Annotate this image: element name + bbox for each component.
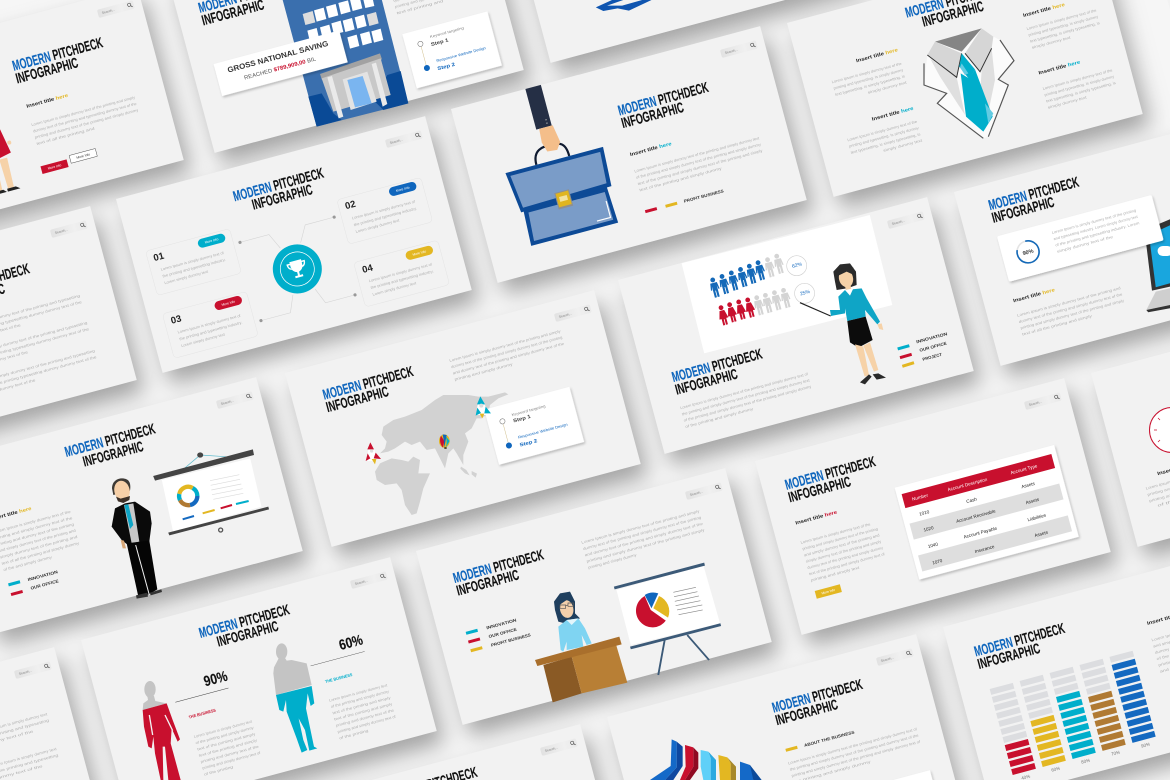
body text: printing and simply dummy — [588, 553, 637, 570]
card 04: the printing and typesetting industry. — [370, 269, 434, 290]
world map — [375, 392, 508, 515]
left column text: text typesetting, is simply typesetting, is — [850, 132, 921, 155]
slide: text only left — [0, 206, 137, 463]
card 01: the printing and typesetting industry. — [162, 258, 226, 278]
body text left: printing and simply dummy text of — [202, 751, 262, 770]
column 70%: 70% — [1111, 750, 1121, 757]
body text: of the printing and simply dummy — [685, 407, 754, 429]
steps card: Keyword targeting — [511, 404, 546, 417]
title: INFOGRAPHIC — [14, 55, 80, 87]
steps card — [402, 11, 502, 88]
column 40% — [990, 683, 1038, 780]
body text — [581, 509, 707, 570]
body text: printing and simply text — [810, 565, 861, 583]
stat 90% — [170, 669, 236, 722]
right column text: printing and typesetting. Is simply dummy — [1044, 75, 1115, 97]
progress card — [997, 195, 1164, 282]
steps card: Responsive Website Design — [436, 46, 486, 63]
subheading: Insert title here — [1013, 287, 1056, 304]
right column text: Insert title here — [1023, 2, 1066, 19]
percentage circles: 62% — [791, 261, 803, 270]
data table: Liabilities — [1027, 512, 1047, 522]
column 60% — [1020, 675, 1068, 775]
illustration: man in suit — [112, 478, 162, 599]
body text left: of the printing — [204, 765, 234, 777]
right column text: Insert title here — [1038, 59, 1081, 76]
data table: Assets — [1021, 481, 1036, 489]
card 04: More Info — [412, 249, 427, 257]
body text: printing and simply dummy — [454, 362, 513, 382]
stat 90%: 90% — [202, 669, 230, 690]
body text: the printing and simply dummy text of the printing and dummy text of the — [789, 734, 919, 772]
left column text: text typesetting, is simply typesetting, is — [835, 74, 905, 97]
card 04 — [354, 240, 450, 307]
data table: Account Description — [947, 477, 988, 492]
card 02: Lorem Ipsum is simply dummy text of — [352, 200, 416, 220]
illustration: desk — [535, 637, 627, 702]
legend: OUR OFFICE — [30, 578, 59, 591]
body text — [1017, 286, 1126, 337]
data table: Account Payable — [963, 526, 998, 540]
people chart: red row — [716, 287, 792, 326]
body text: Lorem Ipsum is simply dummy text of the printing and simply — [449, 329, 561, 363]
slide: account table — [755, 378, 1111, 635]
white card — [847, 770, 940, 780]
right column text: text typesetting, is simply typesetting, is — [1030, 21, 1100, 44]
card 01: 01 — [152, 251, 166, 264]
icon: female body 90% — [143, 681, 181, 780]
body text: Lorem Ipsum is simply dummy text of the printing and simply dummy text of — [680, 372, 809, 410]
illustration: flipchart with pie chart — [614, 563, 721, 675]
body text left: Lorem Ipsum is simply dummy text — [193, 719, 253, 739]
illustration: woman at desk — [554, 592, 592, 652]
slide: briefcase — [451, 26, 807, 283]
body text: of the and simply dummy — [3, 555, 52, 572]
slide: woman with buttons — [0, 0, 184, 243]
title — [232, 166, 329, 218]
title: MODERN PITCHDECK — [63, 421, 157, 461]
illustration: presenter woman — [800, 263, 886, 384]
right column text: simply dummy text — [1047, 95, 1088, 110]
slide: bodies percentage — [81, 557, 437, 780]
column 80% — [1050, 667, 1098, 767]
title: MODERN PITCHDECK — [197, 602, 292, 642]
body text: dummy text of the printing and simply dummy text of the printing — [451, 336, 563, 369]
steps card: Step 1 — [513, 414, 532, 424]
button — [815, 584, 842, 599]
column 60%: 60% — [1051, 766, 1061, 773]
slide: bottom left partial — [0, 647, 101, 780]
title: MODERN PITCHDECK — [973, 621, 1067, 660]
body text right: of the printing and simply dummy — [330, 690, 390, 709]
left column text: Insert title here — [856, 47, 899, 64]
steps card: Step 2 — [437, 62, 456, 72]
column 80%: 80% — [1081, 758, 1091, 765]
body text: and simply dummy text of the printing and — [804, 533, 880, 557]
body text left: printing and dummy text of the — [200, 745, 259, 764]
data table: Cash — [966, 496, 978, 504]
steps card: Keyword targeting — [430, 26, 464, 39]
body text — [634, 136, 766, 192]
body text: dummy text of the printing and simply dummy text of the printing — [583, 516, 702, 551]
buttons — [40, 149, 98, 174]
left column text: Lorem Ipsum is simply dummy text of the — [847, 120, 918, 142]
icon: laptop — [1144, 219, 1170, 312]
right column text — [1023, 0, 1118, 110]
column 90%: 90% — [1141, 742, 1151, 749]
body text: dummy text of the printing and typesetting dummy text of the — [33, 102, 137, 133]
data table: Account Type — [1010, 463, 1038, 475]
card 03: Lorem Ipsum is simply dummy text of — [177, 314, 242, 335]
subheading: Insert title here — [26, 93, 69, 110]
steps card: Responsive Website Design — [518, 423, 568, 440]
body text: printing and dummy text of the printing and simply dummy — [34, 108, 139, 140]
subheading: Insert title here — [795, 510, 838, 527]
button: More Info — [821, 588, 836, 595]
body text — [680, 372, 814, 429]
body text right — [329, 683, 399, 740]
legend: PROFIT BUSINESS — [683, 188, 724, 204]
body text right: text of the printing and simply — [334, 702, 393, 722]
slide: presenter with people chart — [618, 197, 974, 454]
slide: world map — [285, 290, 641, 547]
title: MODERN PITCHDECK — [987, 175, 1081, 214]
card 03: 03 — [170, 313, 183, 327]
illustration: projector screen with donut chart — [153, 449, 269, 535]
left column text: simply dummy text — [867, 80, 908, 95]
body text: printing and simply dummy text of the printing and simply — [1020, 299, 1125, 330]
callout: gross national saving: GROSS NATIONAL SAVING — [226, 39, 329, 75]
title: MODERN PITCHDECK — [321, 364, 415, 404]
icon: clock — [1150, 408, 1170, 452]
body text: simply dummy text of the printing and — [0, 535, 78, 560]
body text left: of the printing and simply dummy — [195, 726, 254, 745]
legend labels: PROJECT — [922, 352, 943, 362]
legend labels — [916, 331, 953, 362]
slide: bar chart — [943, 544, 1170, 780]
body text: the printing and simply dummy text of the printing and simply dummy text — [682, 378, 811, 416]
body text: Lorem Ipsum is simply dummy text of the printing and simply dummy text — [634, 136, 761, 174]
title — [0, 261, 35, 313]
column 90% — [1109, 651, 1158, 751]
data table: 1010 — [919, 509, 930, 517]
card 03: Lorem simply dummy text — [181, 332, 226, 348]
body text — [31, 96, 141, 146]
legend — [898, 346, 914, 366]
data table: Insurance — [974, 544, 995, 554]
body text: Lorem Ipsum is simply dummy text of the — [800, 522, 871, 545]
body text: simply dummy text of the printing and simply — [805, 540, 882, 564]
building illustration — [280, 0, 408, 127]
body text: text of printing and — [396, 0, 444, 15]
icon: 3D chevrons — [650, 739, 762, 780]
progress card: and typesetting industry. Lorem simply dummy text — [1053, 215, 1139, 241]
card 01: Lorem simply dummy text — [164, 269, 209, 285]
data table: 1020 — [923, 525, 935, 533]
left column text: simply dummy text — [883, 138, 924, 153]
icon: hot air balloon — [439, 434, 450, 449]
data table: Assets — [1025, 497, 1040, 505]
card 01: Lorem Ipsum is simply dummy text of — [160, 251, 225, 272]
body text right: printing and simply dummy text of — [337, 714, 397, 734]
title: INFOGRAPHIC — [215, 619, 281, 651]
stacked bar chart — [990, 651, 1158, 780]
card 03 — [162, 291, 258, 358]
body text: text of the printing and simply dummy — [639, 166, 722, 192]
body text: Lorem Ipsum is simply dummy text of the printing and simply — [581, 509, 700, 545]
card 02: More Info — [396, 185, 410, 193]
right column text: Lorem Ipsum is simply dummy text of the — [1042, 68, 1113, 91]
title: MODERN PITCHDECK — [670, 346, 765, 386]
body text left: text of the printing and simply — [197, 732, 256, 752]
slide: man with projector screen — [0, 377, 303, 634]
legend labels: OUR OFFICE — [919, 341, 947, 353]
icon: rocket right — [476, 396, 491, 418]
progress card: of the printing and typesetting industry. Lorem — [1055, 221, 1140, 248]
body text — [0, 510, 81, 572]
body text: text of all the printing and — [36, 127, 95, 146]
legend: OUR OFFICE — [488, 627, 518, 639]
legend: PROFIT BUSINESS — [490, 632, 531, 648]
steps card: Step 2 — [519, 438, 538, 449]
stat 60%: THE BUSINESS — [325, 672, 353, 684]
title: INFOGRAPHIC — [81, 439, 146, 471]
title — [904, 0, 1001, 34]
card 02: 02 — [344, 199, 357, 212]
card 03: More Info — [221, 300, 236, 307]
title: INFOGRAPHIC — [325, 384, 391, 416]
legend: INNOVATION — [27, 569, 58, 582]
slide: top right partial — [1150, 0, 1170, 109]
progress card: simply dummy text of the — [1057, 235, 1114, 254]
card 03: the printing and typesetting industry. — [179, 321, 243, 341]
title: INFOGRAPHIC — [455, 567, 521, 600]
title: INFOGRAPHIC — [787, 474, 853, 506]
slide: laptop and progress card — [954, 109, 1170, 366]
card 01: More Info — [204, 237, 219, 245]
left column text: printing and typesetting. Is simply dummy — [849, 126, 919, 149]
subheading: Insert title here — [629, 141, 673, 158]
body text: text of the printing and simply dummy text of — [809, 552, 886, 576]
body text: text of all the printing and simply — [1022, 314, 1092, 337]
icon: rocket left — [366, 442, 381, 464]
title: MODERN PITCHDECK — [11, 35, 105, 75]
body text: Lorem Ipsum is simply dummy text of the printing and simply dummy text of — [788, 727, 918, 766]
body text right: Lorem Ipsum is simply dummy text — [329, 683, 389, 703]
title: MODERN PITCHDECK — [783, 454, 878, 494]
title: INFOGRAPHIC — [250, 182, 315, 214]
slide: tie and collar — [787, 0, 1143, 197]
icon: collar and tie — [924, 28, 1014, 138]
icon: male body 60% — [273, 643, 317, 753]
card 02: the printing and typesetting industry. — [353, 207, 417, 227]
title: MODERN PITCHDECK — [232, 166, 326, 205]
body text: of the printing and simply dummy text of the printing and simply dummy — [636, 143, 761, 180]
buttons: More Info — [47, 163, 62, 171]
right column text: printing and typesetting. Is simply dummy — [1028, 15, 1099, 37]
body text: and dummy text of the printing and simply dummy text of the — [584, 522, 703, 557]
body text — [391, 0, 460, 15]
icon: blue isometric shape — [596, 0, 651, 11]
percentage circles: 25% — [799, 289, 811, 297]
slide: gross national saving — [168, 0, 524, 153]
body text — [0, 294, 99, 400]
card 04: 04 — [361, 262, 375, 276]
slide: clock — [1091, 290, 1170, 547]
connector dots — [238, 215, 357, 323]
left column text: Insert title here — [871, 106, 915, 123]
body text — [788, 727, 923, 780]
body text: dummy text of the printing and simply dummy — [807, 546, 883, 570]
body text: text of the printing and simply dummy text of the printing and simply — [637, 149, 763, 186]
body text — [1145, 468, 1170, 510]
title: MODERN PITCHDECK — [616, 80, 711, 119]
slide: chevrons — [607, 634, 963, 780]
body text: text of all the printing and simply dummy — [1, 541, 80, 566]
title: MODERN PITCHDECK — [770, 677, 865, 717]
body text left: text of the printing and simply — [199, 738, 258, 758]
title: INFOGRAPHIC — [990, 195, 1057, 227]
body text — [0, 712, 62, 780]
percentage circles — [787, 256, 815, 303]
legend — [645, 188, 724, 214]
stat 60% — [306, 632, 371, 687]
body text: dummy text of the printing and simply dummy text of the — [1018, 292, 1123, 324]
title: INFOGRAPHIC — [774, 697, 840, 729]
legend — [785, 729, 855, 753]
left column text: Lorem Ipsum is simply dummy text of the — [831, 62, 902, 84]
slide: bottom middle partial — [271, 724, 627, 780]
progress card: 90% — [1022, 248, 1034, 257]
stat 60%: 60% — [337, 632, 365, 654]
steps card — [484, 387, 584, 465]
icon: trophy circle — [267, 239, 327, 299]
body text: and dummy text of the printing and simply dummy text of the — [452, 342, 564, 375]
data table: 1040 — [927, 541, 939, 549]
legend: ABOUT THE BUSINESS — [803, 729, 855, 748]
body text right: printing and dummy text of the — [335, 708, 394, 728]
body text: of the printing and simply dummy text of the printing and simply dummy — [683, 385, 812, 423]
body text — [800, 521, 888, 583]
body text right: of the printing — [339, 729, 369, 740]
callout: gross national saving — [214, 30, 348, 96]
title: INFOGRAPHIC — [976, 641, 1042, 673]
body text: printing and simply dummy text of the printing — [802, 527, 878, 551]
right column text: simply dummy text — [1031, 35, 1072, 50]
legend labels: INNOVATION — [916, 331, 948, 344]
icon: woman figure — [0, 101, 23, 197]
title: INFOGRAPHIC — [674, 366, 740, 399]
icon: hand with briefcase — [486, 74, 623, 247]
body text: printing and simply dummy text of the printing and simply — [586, 528, 705, 564]
body text — [1151, 612, 1170, 674]
legend — [8, 569, 61, 596]
progress card: Lorem Ipsum is simply dummy text of the printing — [1051, 209, 1137, 235]
legend — [465, 615, 531, 653]
right column text: text typesetting, is simply typesetting, is — [1046, 81, 1116, 103]
people chart: blue row — [708, 253, 786, 298]
body text: Lorem Ipsum is simply dummy text of the printing and — [1017, 286, 1121, 318]
card 02 — [337, 177, 433, 244]
data table: Number — [911, 493, 929, 502]
column 70% — [1080, 659, 1128, 759]
data table — [895, 445, 1079, 580]
slide: top centre — [504, 0, 860, 63]
body text: printing and simply dummy text of the printing and simply dummy text of — [791, 740, 922, 778]
title: INFOGRAPHIC — [620, 100, 686, 132]
body text right: text of the printing and simply — [332, 696, 391, 715]
left column text — [828, 47, 924, 161]
buttons: More Info — [76, 152, 91, 160]
data table: Account Receivable — [956, 508, 997, 524]
title — [63, 421, 161, 474]
left column text: printing and typesetting. Is simply dummy — [833, 68, 904, 91]
card 04: Lorem Ipsum is simply dummy text of — [368, 262, 433, 283]
card 02: Lorem simply dummy text — [355, 218, 401, 234]
white chart panel — [682, 215, 892, 353]
slide: desk presenter — [416, 468, 772, 725]
connectors — [240, 217, 355, 321]
card 01 — [146, 229, 241, 296]
legend: INNOVATION — [486, 617, 517, 630]
data table: Assets — [1034, 530, 1049, 538]
body text: Lorem Ipsum is simply dummy text of the printing and simply — [31, 96, 135, 127]
data table: 1070 — [932, 558, 943, 565]
stat 90%: THE BUSINESS — [188, 708, 217, 720]
title: MODERN PITCHDECK — [452, 547, 546, 587]
card 04: Lorem simply dummy text — [372, 281, 418, 297]
slide: trophy diagram — [116, 116, 472, 373]
title — [197, 602, 295, 654]
right column text: Lorem Ipsum is simply dummy text of the — [1026, 9, 1097, 31]
body text left — [193, 719, 264, 777]
body text — [449, 329, 566, 382]
callout: gross national saving: REACHED $789,909,00 BIL — [244, 57, 317, 82]
steps card: Step 1 — [430, 38, 450, 48]
